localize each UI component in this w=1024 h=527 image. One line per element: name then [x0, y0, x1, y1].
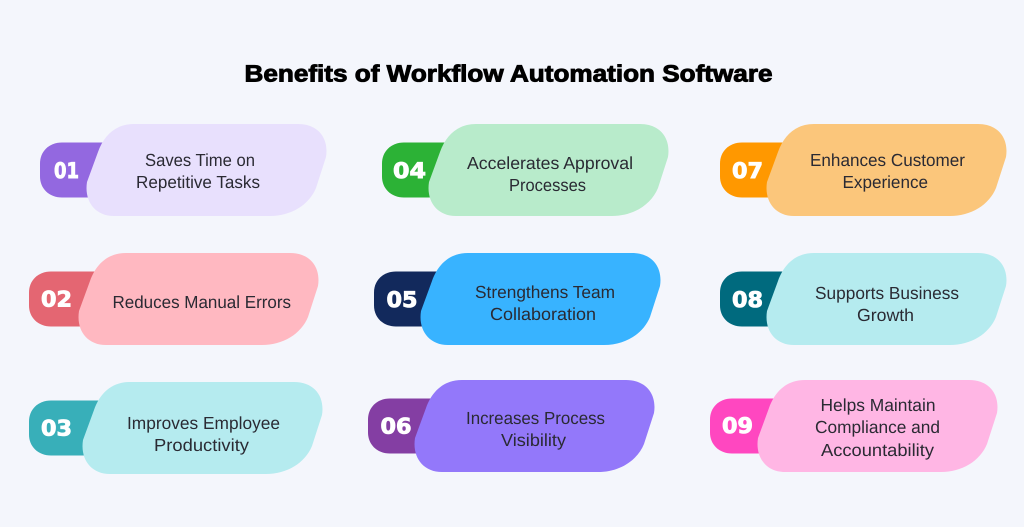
item 03: improves productivity: 03 [41, 416, 72, 442]
item 05: team collaboration [374, 253, 660, 345]
item 06: process visibility: 06 [380, 414, 412, 440]
item 04: accelerates approval: Accelerates Approval [467, 153, 633, 173]
item 08: business growth: Growth [857, 305, 914, 325]
item 09: compliance [710, 380, 997, 472]
item 08: business growth: 08 [732, 288, 763, 313]
item 01: saves time: 01 [54, 159, 79, 184]
item 05: team collaboration: Strengthens Team [475, 282, 615, 302]
item 09: compliance: Compliance and [815, 417, 940, 437]
item 01: saves time: Repetitive Tasks [136, 172, 260, 192]
item 08: business growth: Supports Business [815, 283, 959, 303]
item 05: team collaboration: 05 [386, 288, 418, 313]
item 07: customer experience [720, 124, 1006, 216]
item 04: accelerates approval [382, 124, 668, 216]
title: Benefits of Workflow Automation Software [244, 60, 772, 86]
item 02: reduces errors: 02 [41, 288, 72, 312]
item 09: compliance: Helps Maintain [820, 395, 936, 415]
item 06: process visibility: Visibility [501, 430, 566, 450]
item 07: customer experience: 07 [732, 159, 763, 184]
item 01: saves time [40, 124, 326, 216]
item 02: reduces errors [29, 253, 318, 345]
item 07: customer experience: Enhances Customer [810, 150, 965, 170]
item 06: process visibility: Increases Process [466, 408, 605, 428]
item 04: accelerates approval: 04 [393, 159, 426, 184]
item 07: customer experience: Experience [842, 172, 928, 192]
item 02: reduces errors: Reduces Manual Errors [112, 292, 291, 312]
item 09: compliance: Accountability [821, 440, 934, 460]
item 05: team collaboration: Collaboration [490, 304, 596, 324]
item 03: improves productivity: Productivity [154, 435, 249, 455]
item 03: improves productivity: Improves Employee [127, 413, 280, 433]
item 03: improves productivity [29, 382, 322, 474]
item 06: process visibility [368, 380, 654, 472]
item 01: saves time: Saves Time on [145, 150, 255, 170]
item 08: business growth [720, 253, 1006, 345]
item 04: accelerates approval: Processes [509, 175, 586, 195]
item 09: compliance: 09 [722, 414, 753, 439]
